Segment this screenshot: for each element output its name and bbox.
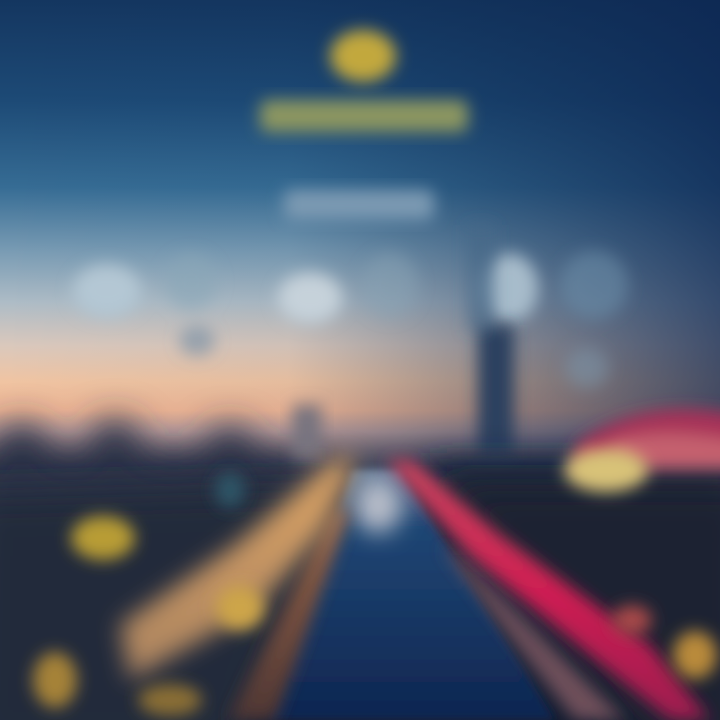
right red road light trail — [386, 460, 710, 720]
logo emblem — [330, 30, 396, 82]
left road light trail — [120, 458, 356, 680]
left brown embankment — [228, 510, 350, 720]
lower left city — [0, 485, 340, 720]
red dome — [575, 409, 720, 470]
distant skyline — [0, 419, 720, 555]
tower — [468, 225, 514, 460]
title bar — [260, 100, 468, 132]
central water channel — [268, 470, 555, 720]
right embankment — [440, 545, 625, 720]
lower right city — [440, 485, 720, 720]
distant building — [292, 405, 322, 460]
city lights — [33, 472, 717, 716]
subtitle bar — [284, 190, 434, 220]
dome lights — [564, 448, 648, 492]
reflection glow on water — [354, 477, 402, 533]
row of blurred icons — [73, 251, 628, 388]
